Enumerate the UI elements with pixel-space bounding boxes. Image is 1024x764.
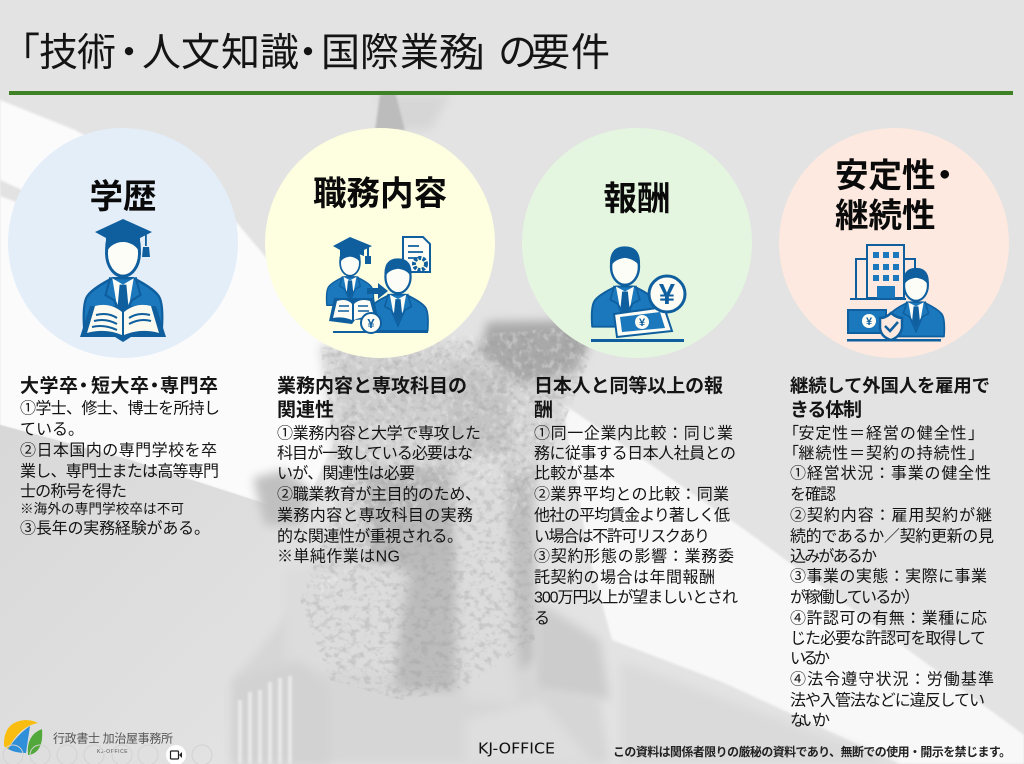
footer label: KJ-OFFICE <box>478 740 555 758</box>
body text: 法や入管法などに違反してい <box>790 692 985 710</box>
body text: ③契約形態の影響：業務委 <box>534 548 734 566</box>
body text: いが、関連性は必要 <box>277 464 415 482</box>
logo: KJ-OFFICE <box>4 720 173 755</box>
body text: い場合は不許可リスクあり <box>534 528 710 546</box>
panel: 学歴 <box>8 128 238 358</box>
subheading: 日本人と同等以上の報 <box>534 375 723 397</box>
body text: ③長年の実務経験がある。 <box>20 520 210 538</box>
heading: 安定性・継続性: 安定性・ <box>835 158 962 195</box>
body text: 比較が基本 <box>534 464 615 482</box>
body text: 「 <box>783 424 799 442</box>
icon: employee with salary: ¥ <box>639 317 646 329</box>
body text: ないか <box>790 712 830 730</box>
body text: 続的であるか／契約更新の見 <box>790 528 994 546</box>
body text: 的な関連性が重視される。 <box>277 528 463 546</box>
body text: 業し、専門士または高等専門 <box>20 462 219 480</box>
body text: ※海外の専門学校卒は不可 <box>20 502 184 516</box>
body text: ②業界平均との比較：同業 <box>534 486 729 504</box>
green title rule <box>9 91 1013 95</box>
body text: ②職業教育が主目的のため、 <box>277 486 481 504</box>
body text: 」 <box>968 426 984 442</box>
heading: 安定性・継続性 <box>835 158 962 235</box>
body text <box>277 424 481 566</box>
heading: 職務内容: 職務内容 <box>313 176 447 213</box>
body text: を確認 <box>790 486 836 504</box>
icon: graduate reading a book <box>80 219 166 342</box>
icon: company building and employee: ¥ <box>866 316 873 328</box>
body text: ④許認可の有無：業種に応 <box>790 610 987 628</box>
icon: employee with salary: ¥ <box>659 279 675 311</box>
subheading: 業務内容と専攻科目の <box>277 375 467 397</box>
icon: graduate to employee: ¥ <box>367 316 375 331</box>
text block: 報酬 requirements <box>534 375 738 628</box>
panel: 安定性・継続性 <box>779 128 1009 358</box>
body text: ①経営状況：事業の健全性 <box>790 464 991 482</box>
body text: 科目が一致している必要はな <box>277 444 473 462</box>
body text: 士の称号を得た <box>20 482 127 500</box>
body text: ①同一企業内比較：同じ業 <box>534 424 733 442</box>
body text: ている。 <box>20 422 84 438</box>
body text <box>20 400 220 538</box>
video toolbar <box>3 745 212 764</box>
heading: 学歴: 学歴 <box>90 179 156 216</box>
panel: 職務内容 <box>265 128 495 358</box>
icon: company building and employee <box>847 245 944 342</box>
body text: じた必要な許認可を取得して <box>790 630 986 648</box>
body text: ④法令遵守状況：労働基準 <box>790 670 994 688</box>
body text: ③事業の実態：実際に事業 <box>790 568 987 586</box>
subheading <box>534 375 723 421</box>
body text: 継続性＝契約の持続性 <box>798 444 966 462</box>
statue texture <box>300 330 600 700</box>
confidentiality notice: この資料は関係者限りの厳秘の資料であり、無断での使用・開示を禁じます。 <box>613 745 1011 759</box>
body text: が稼働しているか） <box>790 588 920 606</box>
body text <box>783 424 994 730</box>
heading: 報酬: 報酬 <box>604 181 670 218</box>
body text: 「 <box>783 444 799 462</box>
body text: 託契約の場合は年間報酬 <box>534 568 715 586</box>
body text: 業務内容と専攻科目の実務 <box>277 506 473 524</box>
body text: ②契約内容：雇用契約が継 <box>790 506 992 524</box>
body text: ①学士、修士、博士を所持し <box>20 400 220 418</box>
body text: 務に従事する日本人社員との <box>534 444 736 462</box>
subheading <box>790 375 990 421</box>
body text: 他社の平均賃金より著しく低 <box>534 506 730 524</box>
text block: 安定性・継続性 requirements <box>783 375 994 730</box>
office name latin: KJ-OFFICE <box>97 749 128 755</box>
body text <box>534 424 738 628</box>
statue base tones <box>233 330 610 764</box>
subheading: 関連性 <box>277 399 334 421</box>
body text: ②日本国内の専門学校を卒 <box>20 442 217 460</box>
text block: 職務内容 requirements <box>277 375 481 566</box>
body text: ※単純作業はNG <box>277 548 400 566</box>
icon: employee with salary <box>591 246 685 342</box>
body text: 」 <box>968 446 984 462</box>
text block: 学歴 requirements <box>20 374 220 538</box>
subheading: 継続して外国人を雇用で <box>790 375 990 396</box>
subheading: 大学卒・短大卒・専門卒 <box>20 374 218 397</box>
subheading: きる体制 <box>790 399 862 421</box>
subheading <box>277 375 467 421</box>
body text: いるか <box>790 650 830 668</box>
office name: 行政書士 加治屋事務所 <box>53 732 173 746</box>
heading: 安定性・継続性: 継続性 <box>835 198 936 235</box>
panel: 報酬 <box>522 128 752 358</box>
body text: る <box>534 610 550 628</box>
body text: 込みがあるか <box>790 548 877 566</box>
icon: graduate to employee <box>327 237 430 333</box>
body text: ①業務内容と大学で専攻した <box>277 424 481 442</box>
title: 「技術・人文知識・国際業務」の要件 <box>1 32 610 75</box>
subheading: 酬 <box>534 399 553 421</box>
body text: 安定性＝経営の健全性 <box>798 424 966 442</box>
body text: 300万円以上が望ましいとされ <box>534 588 738 606</box>
